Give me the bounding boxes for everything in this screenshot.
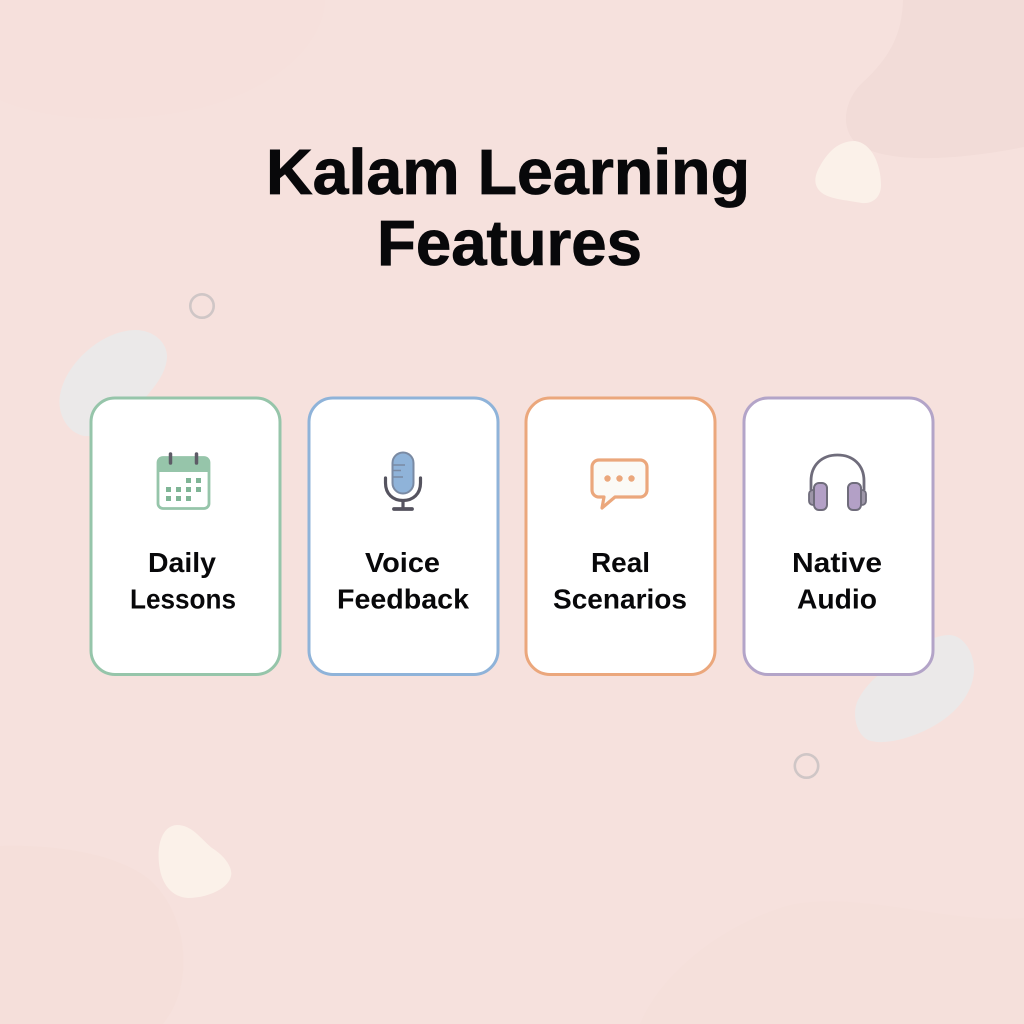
label: Real Scenarios: Scenarios — [553, 584, 687, 614]
label: Native Audio — [792, 547, 882, 614]
label: Daily Lessons: Daily — [148, 547, 217, 578]
label: Voice Feedback: Voice — [365, 547, 440, 578]
icon: speech bubble — [592, 460, 647, 508]
panel: Voice Feedback — [309, 398, 498, 674]
background blob: cream top right — [815, 141, 881, 203]
label: Voice Feedback: Feedback — [337, 584, 470, 614]
panel: Native Audio — [744, 398, 933, 674]
label: Daily Lessons: Lessons — [130, 584, 236, 614]
label: Native Audio: Audio — [797, 584, 877, 614]
background blob: cream bottom left — [159, 825, 231, 898]
decorative ring: left — [190, 294, 214, 318]
panel: Daily Lessons — [91, 398, 280, 674]
background blob: grey right — [855, 635, 974, 742]
title: Features — [377, 207, 642, 279]
label: Real Scenarios — [553, 547, 687, 614]
label: Native Audio: Native — [792, 547, 882, 578]
label: Real Scenarios: Real — [591, 547, 650, 578]
background blob: top left — [0, 0, 325, 118]
panel: Real Scenarios — [526, 398, 715, 674]
decorative ring: right — [795, 754, 818, 778]
icon: headphones — [809, 455, 866, 510]
label: Daily Lessons — [130, 547, 236, 614]
title — [266, 136, 750, 279]
background blob: grey left — [59, 330, 167, 436]
title: Kalam Learning — [266, 136, 750, 208]
icon: calendar — [158, 454, 209, 508]
background blob: top right — [846, 0, 1024, 158]
label: Voice Feedback — [337, 547, 470, 614]
background blob: bottom right — [640, 901, 1024, 1024]
icon: microphone — [386, 452, 420, 509]
background blob: bottom left — [0, 846, 183, 1024]
